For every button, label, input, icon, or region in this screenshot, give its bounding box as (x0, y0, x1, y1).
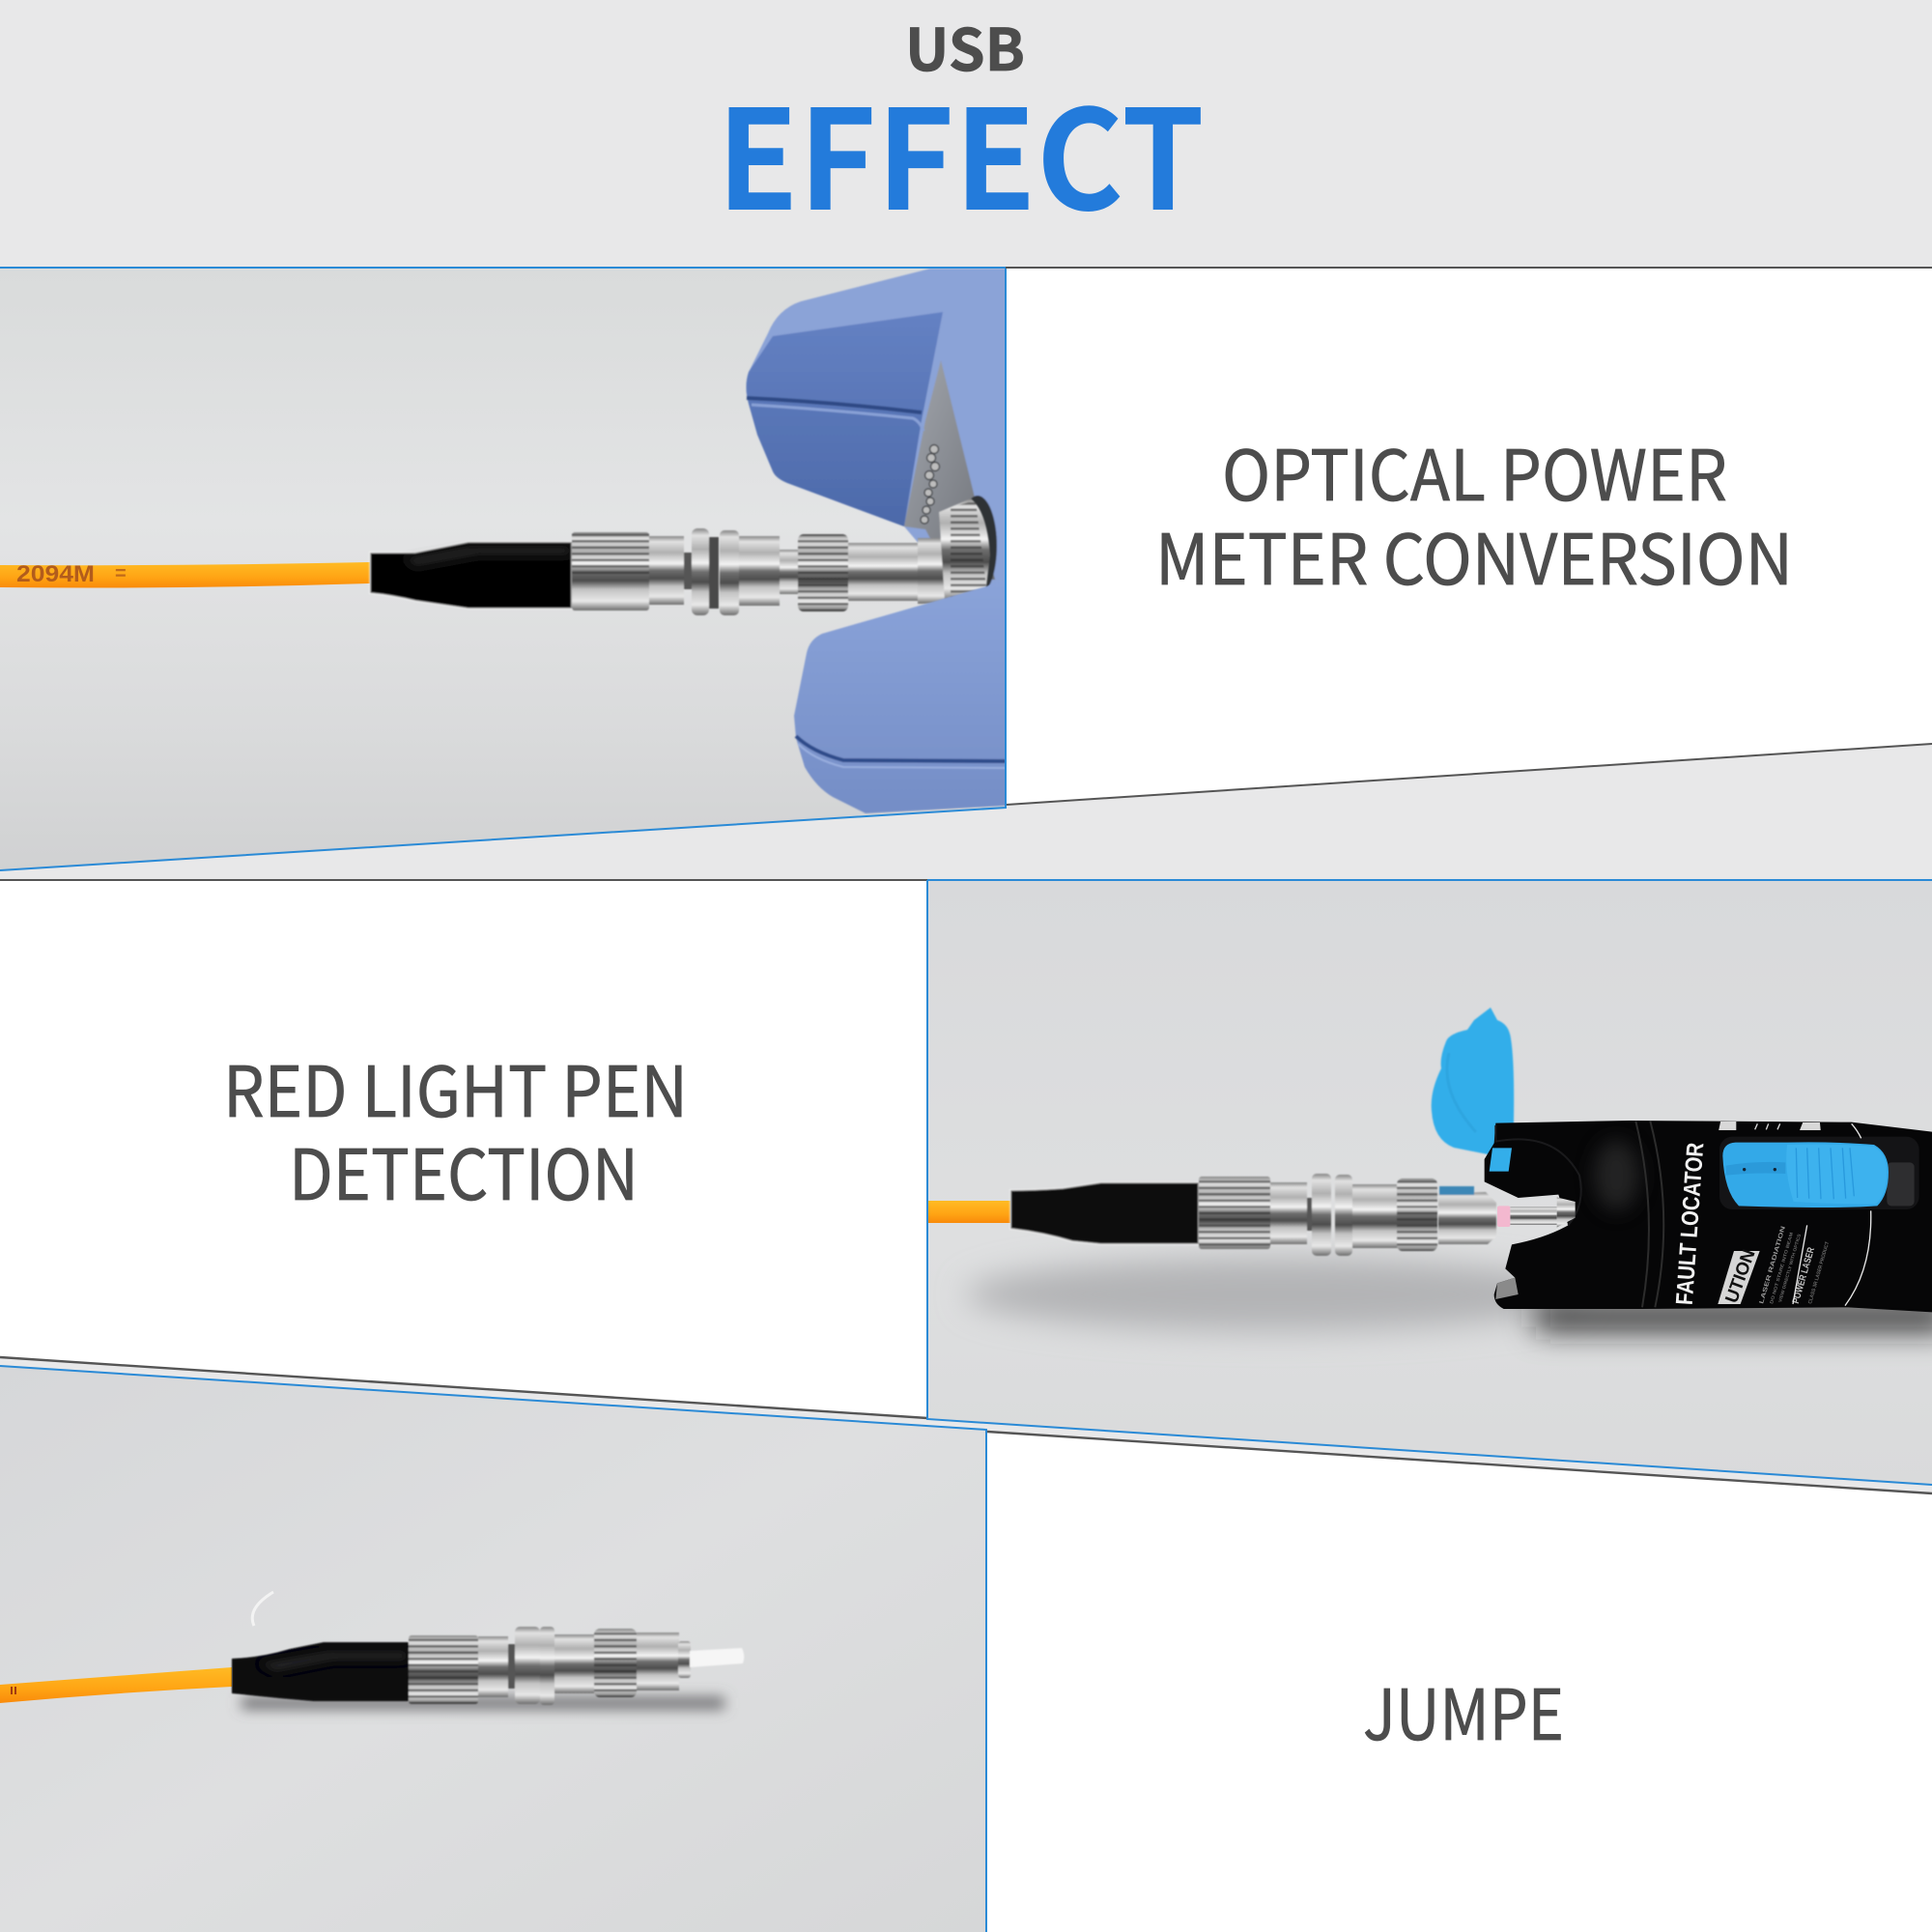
panel: optical power meter photo (0, 269, 1006, 872)
icon: orange fibre cable with print: = (115, 563, 127, 584)
icon: fibre connector assembly (370, 498, 990, 615)
shadows under pen and connector (966, 1258, 1932, 1331)
icon: power meter lower housing (794, 580, 1006, 813)
printed label: fault locator: FAULT LOCATOR (1672, 1142, 1709, 1306)
printed label: caution: UTION (1720, 1246, 1759, 1305)
panel: jumper photo (0, 1366, 986, 1932)
icon: orange fibre cable (928, 1201, 1010, 1223)
printed label: laser warning small print: LASER RADIATION (1758, 1225, 1787, 1305)
title: EFFECT: EFFECT (717, 50, 1205, 250)
panel: optical power meter text (1006, 268, 1932, 805)
label line: red light pen: RED LIGHT PEN (223, 1036, 688, 1137)
icon: orange fibre cable with print: 2094M (16, 561, 95, 587)
printed label: laser warning small print: DO NOT STARE INTO BEAM (1769, 1232, 1794, 1304)
panel: jumper text (987, 1432, 1932, 1932)
printed label: laser warning small print (1758, 1225, 1831, 1305)
shadow under connector (242, 1697, 724, 1709)
printed label: laser warning small print: VIEW DIRECTLY WITH OPTICS (1777, 1234, 1802, 1303)
label line: meter conversion: METER CONVERSION (1155, 503, 1793, 605)
panel: red light pen text (0, 880, 927, 1418)
printed label: laser warning small print: POWER LASER (1791, 1246, 1817, 1305)
label line: detection: DETECTION (289, 1119, 639, 1220)
icon: fibre connector assembly (1010, 1174, 1496, 1256)
icon: visual fault locator pen (1485, 1121, 1932, 1312)
reflection wisp (252, 1592, 273, 1626)
icon: orange fibre cable with print (0, 561, 370, 587)
icon: orange fibre cable (0, 1667, 232, 1703)
subtitle: USB: USB (905, 4, 1025, 88)
header (717, 4, 1205, 250)
label: jumpe: JUMPE (1363, 1659, 1564, 1760)
panel border: red light pen photo (927, 880, 1932, 1485)
label line: optical power: OPTICAL POWER (1222, 419, 1727, 521)
panel border: optical power meter photo (0, 268, 1006, 870)
panel: red light pen photo (928, 881, 1932, 1486)
panel border: jumper photo (0, 1366, 986, 1932)
icon: blue dust cap (1432, 1008, 1514, 1171)
icon: power meter upper housing (746, 269, 1006, 618)
icon: fibre connector assembly with white ferrule (232, 1627, 744, 1705)
printed label: laser warning small print: CLASS 3R LASER PRODUCT (1807, 1240, 1831, 1305)
